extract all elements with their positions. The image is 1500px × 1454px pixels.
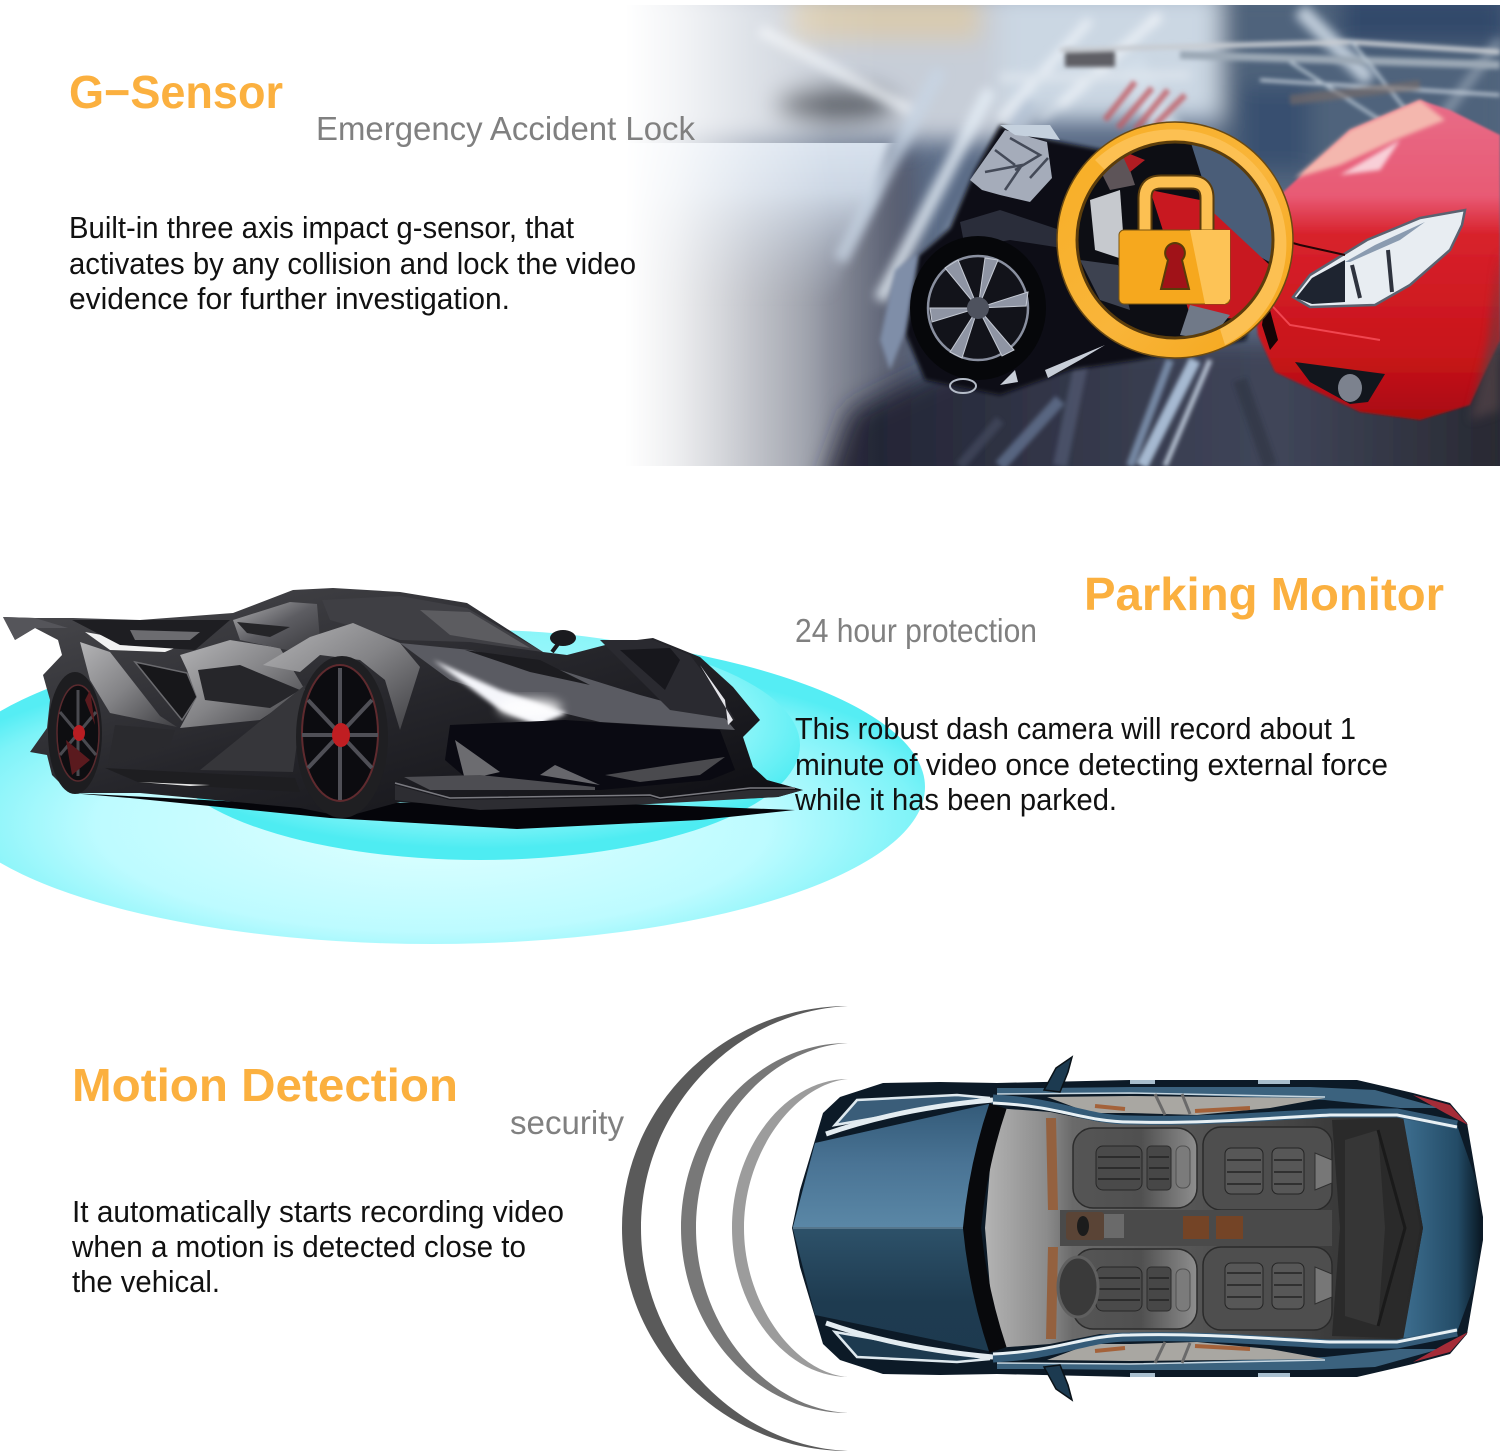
subtitle: security: security: [510, 1104, 624, 1141]
text block: motion detection description: when a motion is detected close to: [71, 1229, 526, 1264]
front seat: [1073, 1128, 1197, 1208]
tail light: [1413, 1095, 1468, 1125]
bright hood highlight: [433, 660, 567, 730]
white hood edge lower: [826, 1323, 993, 1357]
subtitle: 24 hour protection: 24 hour protection: [795, 612, 1037, 649]
text block: parking monitor description: minute of video once detecting external force: [795, 747, 1388, 782]
silver rear flank: [80, 642, 177, 727]
front fender over wheel: [263, 623, 420, 730]
roof rail: [993, 1099, 1457, 1125]
rear deck: [1332, 1118, 1420, 1338]
section: motion detection text: [71, 1059, 624, 1299]
section: parking monitor text: [794, 568, 1444, 817]
silver fender edge: [878, 235, 942, 370]
lower sill band: [997, 1349, 1440, 1370]
panel: g-sensor crash photo: [646, 5, 1500, 466]
text block: g-sensor description: [69, 210, 636, 316]
alloy wheel: [910, 236, 1046, 380]
debris: [1000, 345, 1105, 385]
bottom half details: [826, 1247, 1468, 1400]
trunk: [1403, 1118, 1481, 1338]
text block: motion detection description: [71, 1194, 564, 1299]
icon: padlock in gold ring: [1057, 122, 1293, 358]
body silhouette: [3, 588, 803, 817]
sports car: [3, 588, 803, 829]
front wheel: [296, 656, 388, 818]
door handles: [1130, 1080, 1290, 1084]
side window: [233, 602, 320, 650]
text block: parking monitor description: This robust dash camera will record about 1: [795, 711, 1356, 746]
carbon strut: [200, 685, 305, 772]
wrecked black car: [880, 125, 1262, 395]
section: g-sensor text: [69, 66, 695, 316]
lower side mirror: [1044, 1365, 1072, 1400]
hood: [400, 643, 735, 730]
hood lower: [793, 1229, 993, 1352]
heading: G-Sensor: G−Sensor: [69, 66, 283, 118]
headlight: [1293, 210, 1465, 307]
center console: [1060, 1210, 1332, 1246]
text block: parking monitor description: while it has been parked.: [794, 782, 1117, 817]
red car: [1252, 100, 1500, 420]
crumpled silver fender: [970, 130, 1052, 202]
door panel: [180, 640, 305, 728]
lower rear seat: [1203, 1247, 1332, 1330]
side mirror: [1044, 1057, 1072, 1092]
wood dash trim: [1046, 1118, 1058, 1210]
floor: [820, 340, 1500, 490]
light panel with sharp top edge: [656, 143, 896, 282]
text block: g-sensor description: Built-in three axis impact g-sensor, that: [69, 210, 574, 245]
lower roof rail: [993, 1332, 1457, 1358]
fender scoop: [835, 1095, 990, 1125]
dark block and pale bars: [1060, 40, 1500, 130]
heading: Parking Monitor: Parking Monitor: [1084, 568, 1444, 620]
mirror rear: [237, 622, 290, 637]
top half details: [826, 1057, 1468, 1210]
upper misty band: [590, 0, 1500, 190]
sunlit hood highlight: [1295, 100, 1445, 178]
heading: Motion Detection: Motion Detection: [72, 1059, 458, 1111]
subtitle: Emergency Accident Lock: Emergency Accident Lock: [316, 110, 695, 147]
wing blade: [3, 617, 68, 640]
lower door handles: [1130, 1373, 1290, 1377]
lower tail light: [1413, 1332, 1468, 1362]
mirror: [550, 630, 576, 652]
lower side window: [1047, 1342, 1325, 1361]
lower-left grey fade: [650, 153, 922, 466]
front intake: [445, 720, 735, 790]
hood upper: [793, 1103, 993, 1227]
side sill: [105, 768, 300, 792]
windshield: [322, 596, 543, 652]
hood line shadow: [465, 650, 590, 685]
fender scoop lower: [835, 1332, 990, 1362]
lower wood trim: [1046, 1247, 1058, 1339]
panel: parking monitor cyan detection zone and sports car: [0, 588, 925, 944]
grille and fog lamp: [1295, 362, 1385, 404]
inner cyan ellipse: [160, 630, 800, 860]
text block: g-sensor description: activates by any collision and lock the video: [69, 246, 636, 281]
dark door lower: [198, 665, 300, 708]
ground shadow: [70, 793, 795, 829]
upper sill band: [997, 1087, 1440, 1108]
icon: motion sensor arcs: [622, 1006, 848, 1451]
steering wheel: [1058, 1257, 1098, 1317]
text block: g-sensor description: evidence for further investigation.: [69, 281, 510, 316]
panel: top-view blue car: [792, 1057, 1483, 1400]
rear wheel: [48, 672, 102, 794]
windshield edge: [972, 1106, 998, 1350]
outer cyan ellipse: [0, 630, 925, 944]
white hood edge: [826, 1100, 993, 1134]
white gap under wing: [85, 632, 175, 652]
splitter: [395, 785, 803, 810]
lower front seat: [1073, 1249, 1197, 1329]
text block: motion detection description: It automatically starts recording video: [72, 1194, 564, 1229]
side scoop: [135, 662, 197, 720]
text block: parking monitor description: [794, 711, 1388, 817]
side window: [1047, 1096, 1325, 1115]
cabin: [985, 1108, 1423, 1348]
text block: motion detection description: the vehical.: [72, 1264, 220, 1299]
inside ring scene: [1075, 140, 1275, 340]
car body outline: [792, 1080, 1483, 1377]
rear seat: [1203, 1127, 1332, 1210]
